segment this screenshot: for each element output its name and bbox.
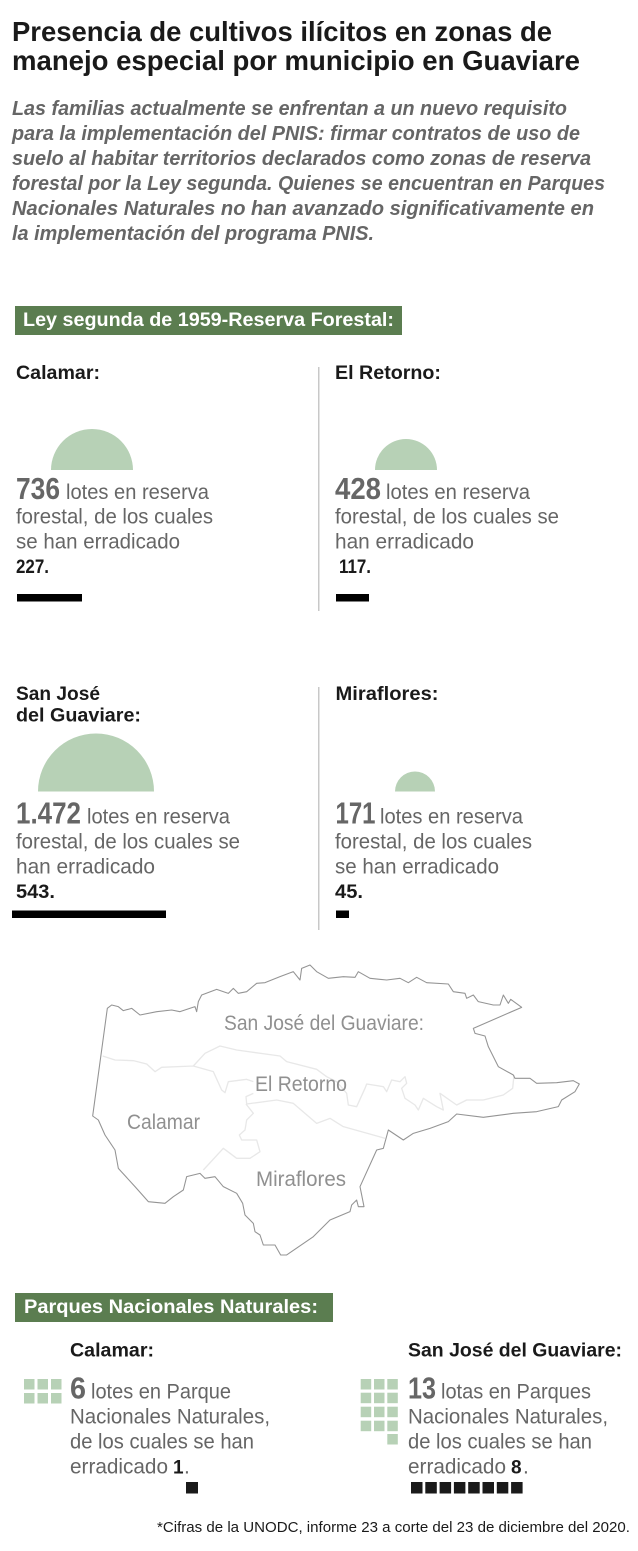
- bar: 543 erradicados: [12, 910, 166, 918]
- intro text: suelo al habitar territorios declarados como zonas de reserva: [12, 147, 591, 170]
- panel: Miraflores reserva forestal: 45.: [335, 882, 363, 903]
- panel: San José del Guaviare parques: San José del Guaviare:: [408, 1340, 622, 1362]
- panel: Calamar parques: erradicado: [70, 1456, 168, 1478]
- panel: San José del Guaviare reserva forestal: del Guaviare:: [16, 704, 141, 726]
- panel: San José del Guaviare parques: Nacionales Naturales,: [408, 1406, 608, 1428]
- section heading: Parques Nacionales Naturales: [15, 1293, 333, 1322]
- intro text: forestal por la Ley segunda. Quienes se encuentran en Parques: [12, 172, 605, 195]
- title: Presencia de cultivos ilícitos en zonas de: [12, 16, 552, 47]
- panel: Miraflores reserva forestal: [335, 683, 532, 918]
- map label: Miraflores: Miraflores: [256, 1168, 346, 1191]
- map label: San José del Guaviare: San José del Guaviare:: [224, 1012, 424, 1035]
- panel: Calamar reserva forestal: Calamar:: [16, 362, 100, 384]
- semicircle: 171 lotes: [395, 772, 435, 792]
- panel: Calamar parques: .: [184, 1456, 190, 1478]
- panel: San José del Guaviare reserva forestal: han erradicado: [16, 856, 155, 878]
- panel: Calamar reserva forestal: lotes en reserva: [66, 481, 209, 504]
- square: 1 erradicado: [186, 1482, 198, 1494]
- panel: San José del Guaviare parques: lotas en Parques: [441, 1380, 591, 1404]
- semicircle: 1.472 lotes: [38, 734, 154, 792]
- panel: El Retorno reserva forestal: 428: [335, 471, 381, 506]
- intro text: [11, 97, 605, 245]
- panel: Calamar reserva forestal: 227.: [16, 557, 49, 578]
- bar: 117 erradicados: [336, 594, 369, 602]
- panel: Miraflores reserva forestal: lotes en reserva: [380, 806, 523, 828]
- panel: El Retorno reserva forestal: forestal, de los cuales se: [335, 506, 559, 528]
- bar: 45 erradicados: [336, 910, 349, 918]
- panel: Miraflores reserva forestal: 171: [336, 796, 376, 830]
- panel: El Retorno reserva forestal: [335, 362, 559, 602]
- panel: Calamar parques: [24, 1340, 270, 1494]
- panel: San José del Guaviare parques: de los cuales se han: [408, 1430, 592, 1454]
- squares: 13 lotes: [361, 1379, 398, 1444]
- title: [12, 16, 580, 76]
- panel: San José del Guaviare parques: .: [523, 1456, 529, 1478]
- panel: San José del Guaviare reserva forestal: 1.472: [16, 796, 81, 830]
- panel: San José del Guaviare parques: erradicado: [408, 1456, 506, 1478]
- section heading: Parques Nacionales Naturales: Parques Nacionales Naturales:: [24, 1296, 318, 1318]
- section heading: Ley segunda: Ley segunda de 1959-Reserva Forestal:: [23, 309, 394, 331]
- panel: Calamar parques: 6: [70, 1370, 86, 1406]
- panel: San José del Guaviare parques: 13: [408, 1370, 436, 1406]
- panel: Calamar parques: Calamar:: [70, 1340, 154, 1362]
- panel: San José del Guaviare reserva forestal: 543.: [16, 882, 55, 903]
- squares: 8 erradicados: [411, 1482, 523, 1494]
- source note: *Cifras de la UNODC, informe 23 a corte del 23 de diciembre del 2020.: [157, 1519, 630, 1536]
- map label: El Retorno: El Retorno: [255, 1073, 347, 1096]
- bar: 227 erradicados: [17, 594, 82, 602]
- panel: San José del Guaviare reserva forestal: San José: [16, 683, 100, 705]
- intro text: para la implementación del PNIS: firmar contratos de uso de: [11, 122, 580, 145]
- map of Guaviare municipalities: [93, 965, 579, 1255]
- panel: San José del Guaviare parques: [361, 1340, 622, 1494]
- panel: Calamar parques: de los cuales se han: [70, 1430, 254, 1454]
- panel: Calamar reserva forestal: forestal, de los cuales: [16, 506, 213, 528]
- panel: Calamar reserva forestal: 736: [16, 471, 60, 506]
- panel: El Retorno reserva forestal: lotes en reserva: [386, 481, 530, 504]
- panel: El Retorno reserva forestal: han erradicado: [335, 530, 474, 554]
- intro text: la implementación del programa PNIS.: [12, 222, 374, 245]
- title: manejo especial por municipio en Guaviare: [12, 45, 580, 76]
- intro text: Las familias actualmente se enfrentan a un nuevo requisito: [12, 97, 567, 120]
- panel: Miraflores reserva forestal: se han erradicado: [335, 856, 499, 878]
- panel: San José del Guaviare reserva forestal: forestal, de los cuales se: [16, 830, 240, 854]
- semicircle: 736 lotes: [51, 429, 133, 470]
- squares: 6 lotes: [24, 1379, 62, 1404]
- panel: San José del Guaviare reserva forestal: lotes en reserva: [87, 806, 230, 828]
- panel: El Retorno reserva forestal: 117.: [339, 557, 371, 578]
- intro text: Nacionales Naturales no han avanzado significativamente en: [12, 197, 594, 220]
- panel: Calamar reserva forestal: [16, 362, 213, 602]
- panel: Calamar parques: lotes en Parque: [91, 1380, 231, 1404]
- panel: El Retorno reserva forestal: El Retorno:: [335, 362, 441, 384]
- panel: San José del Guaviare parques: 8: [511, 1458, 522, 1478]
- map label: Calamar: Calamar: [127, 1111, 200, 1134]
- panel: Calamar parques: Nacionales Naturales,: [70, 1406, 270, 1428]
- panel: Calamar reserva forestal: se han erradicado: [16, 530, 180, 554]
- panel: Miraflores reserva forestal: Miraflores:: [336, 683, 438, 705]
- panel: Calamar parques: 1: [173, 1458, 184, 1478]
- semicircle: 428 lotes: [375, 439, 437, 470]
- panel: San José del Guaviare reserva forestal: [12, 683, 240, 918]
- panel: Miraflores reserva forestal: forestal, de los cuales: [335, 830, 532, 854]
